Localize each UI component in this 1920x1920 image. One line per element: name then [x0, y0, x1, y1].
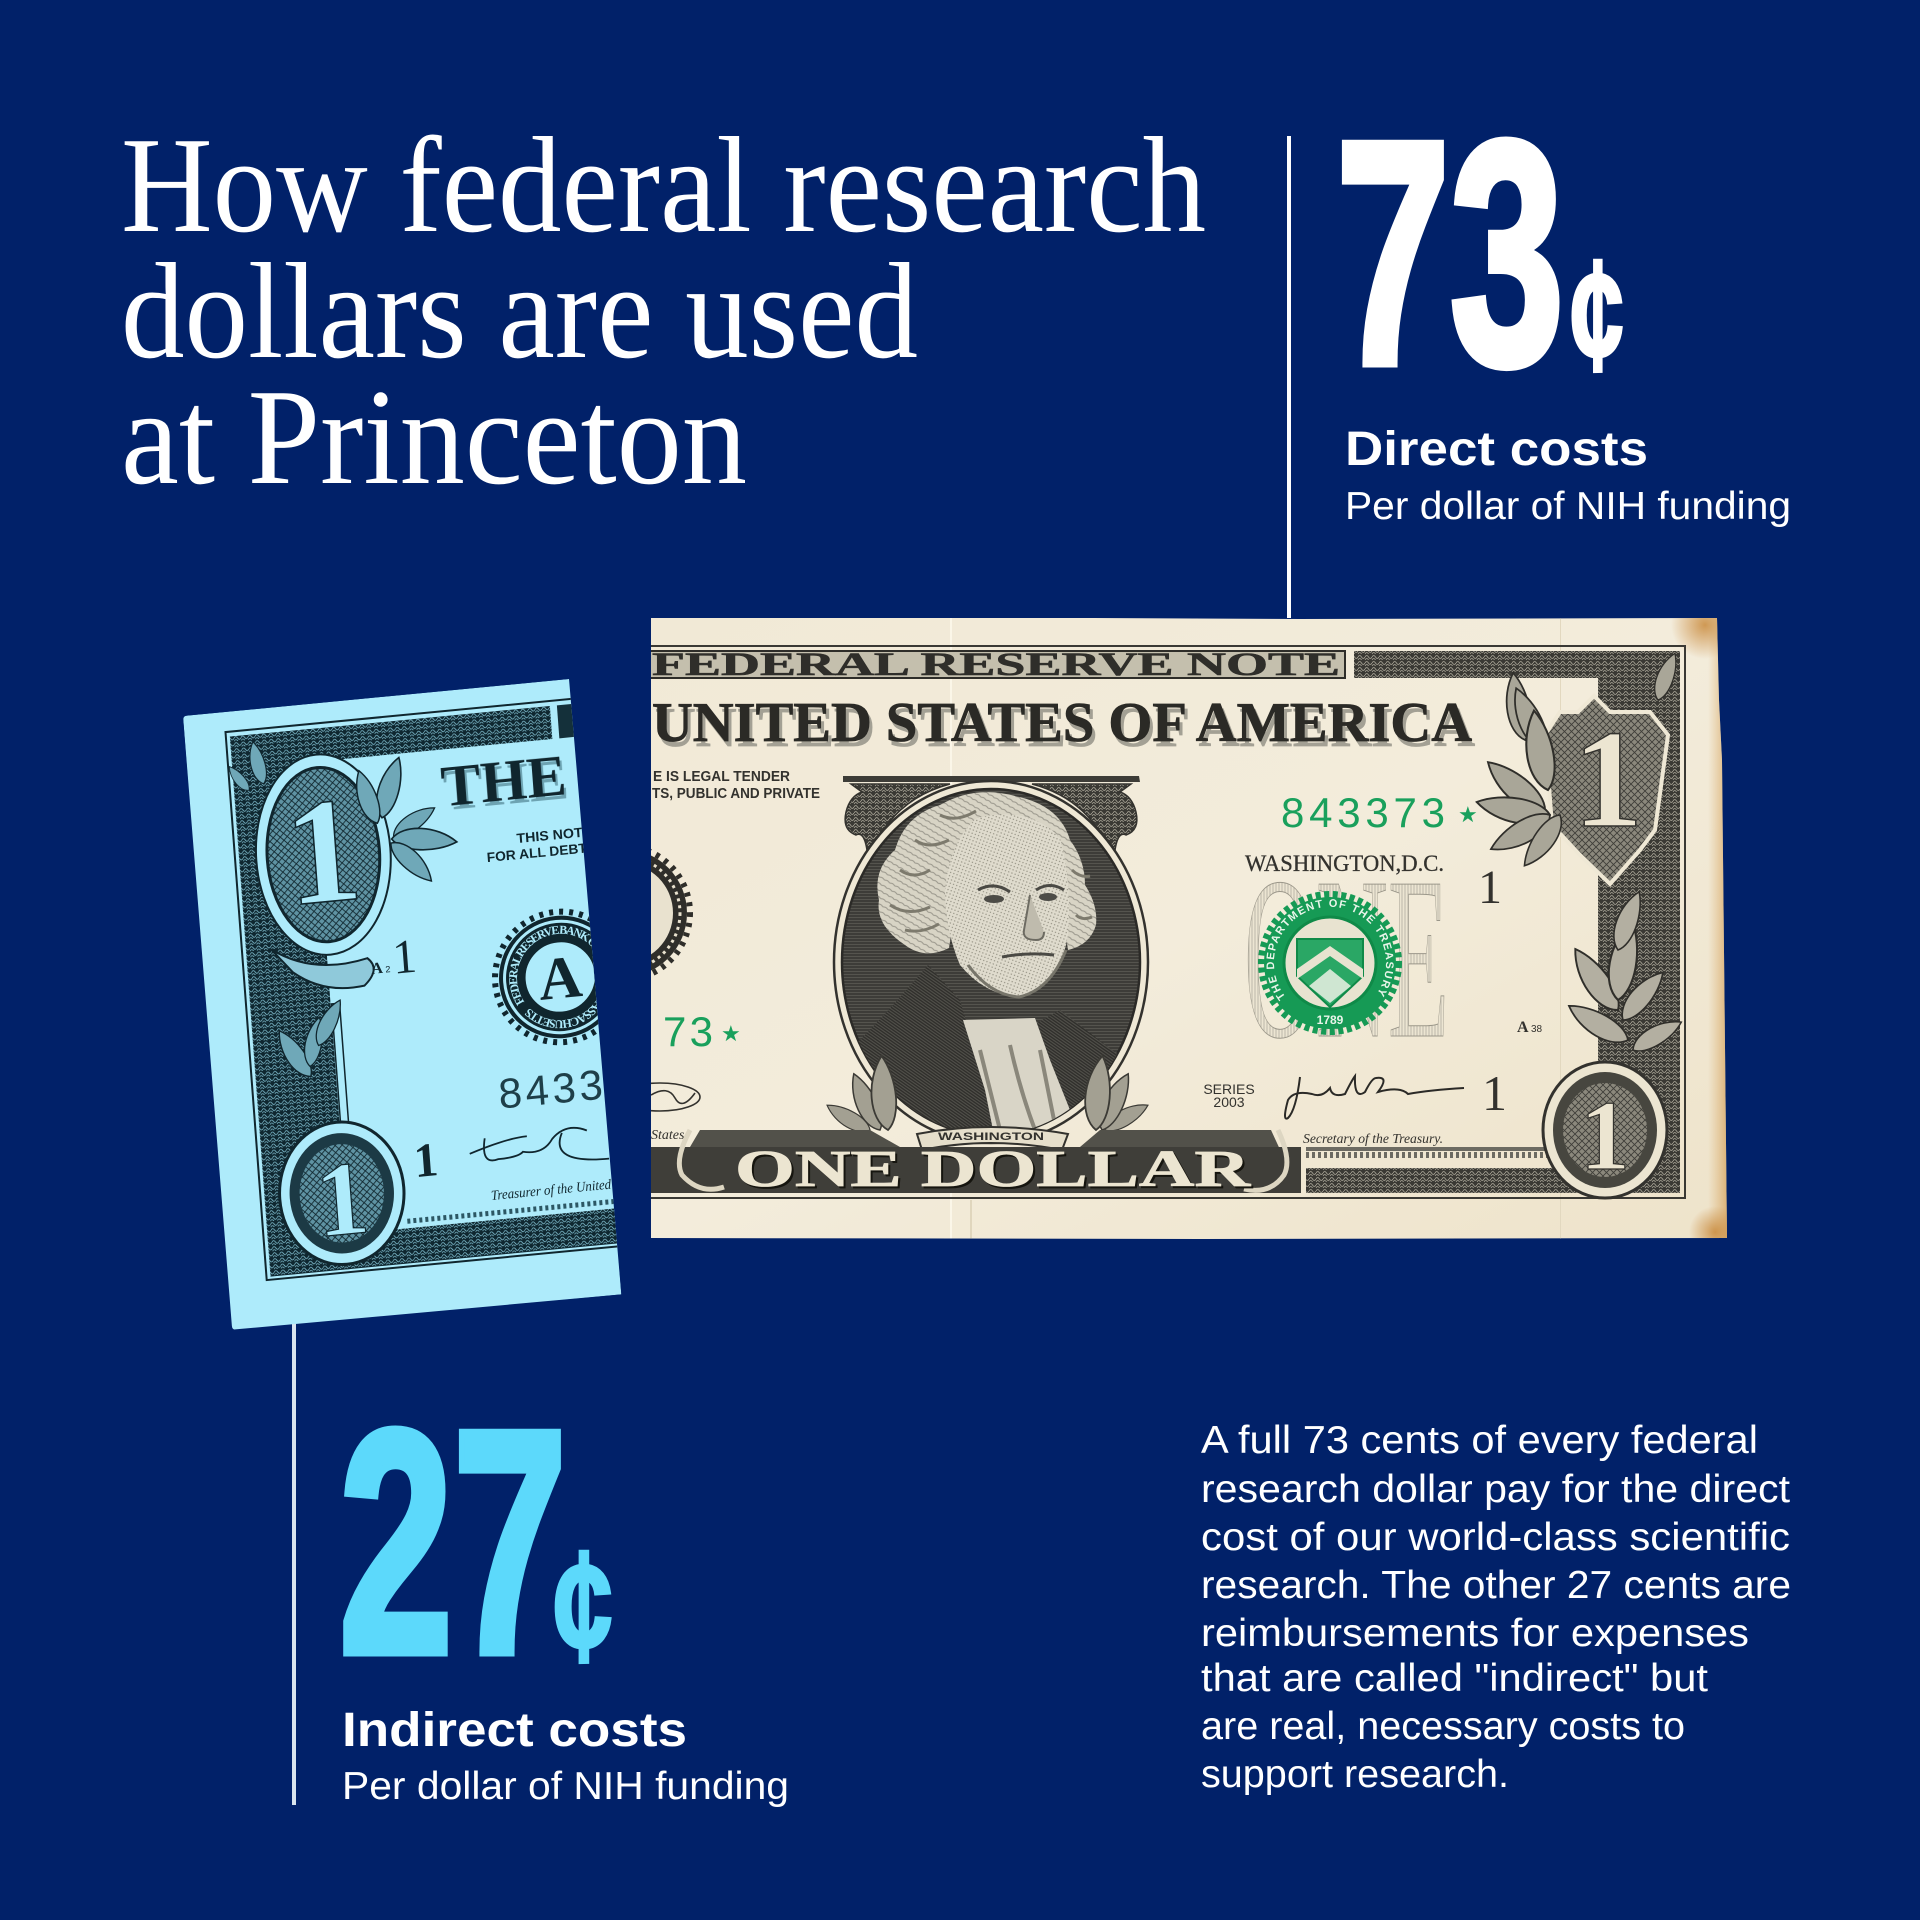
stat: 73 cents direct costs: Per dollar of NIH funding [1345, 485, 1791, 528]
title [121, 109, 1206, 513]
stat: 73 cents direct costs: Direct costs [1345, 423, 1648, 476]
title: dollars are used [121, 235, 918, 387]
federal reserve seal [492, 908, 598, 1046]
bottom right digit 1 medallion [1543, 1062, 1667, 1198]
plate position a38 [1517, 1022, 1542, 1032]
legal text [485, 824, 588, 865]
digit 1 oval: 1 [279, 765, 367, 938]
portrait frame [834, 776, 1148, 1143]
partial federal reserve seal [651, 848, 693, 976]
treasury seal [1258, 891, 1402, 1035]
green serial number: 843373 [1281, 789, 1445, 836]
plate a2: A [371, 960, 384, 978]
washington banner: WASHINGTON [938, 1131, 1044, 1143]
federal reserve seal: A [536, 943, 585, 1014]
laurel leaves [229, 742, 458, 1078]
upper laurel leaves [1474, 650, 1682, 872]
green serial left [665, 1017, 740, 1046]
outer frame [651, 646, 1685, 1198]
signature [1285, 1076, 1464, 1119]
outer frame [226, 698, 626, 1280]
body paragraph: research. The other 27 cents are [1201, 1564, 1791, 1607]
green serial number: ★ [1458, 802, 1478, 827]
stat: 73 cents direct costs [1336, 76, 1791, 528]
green serial number [1282, 798, 1476, 828]
plate position a38: 38 [1531, 1024, 1543, 1035]
scroll ornament [271, 948, 375, 990]
ornament row [407, 1201, 622, 1221]
the heading: THE [439, 742, 569, 819]
series 2003: 2003 [1213, 1094, 1245, 1110]
body paragraph: research dollar pay for the direct [1201, 1468, 1790, 1511]
bottom right digit 1 medallion: 1 [1580, 1080, 1630, 1191]
body paragraph: support research. [1201, 1753, 1509, 1796]
portrait: george washington [823, 792, 1152, 1150]
digit 1 medallion [278, 1120, 406, 1266]
plate number 1: 1 [1478, 861, 1502, 914]
right shield with digit 1: 1 [1573, 702, 1643, 857]
plate position a38: A [1517, 1019, 1529, 1036]
treasury seal: 1789 [1317, 1013, 1344, 1027]
secretary caption: Secretary of the Treasury. [1303, 1132, 1443, 1147]
title: How federal research [121, 109, 1206, 261]
series 2003 [1204, 1084, 1254, 1107]
green serial left: ★ [721, 1021, 741, 1046]
stat: 73 cents direct costs: ¢ [1570, 227, 1624, 403]
band: one dollar: ONE DOLLAR [735, 1141, 1252, 1198]
dollar bill: 73 percent portion [651, 618, 1727, 1239]
legal tender text: TS, PUBLIC AND PRIVATE [652, 786, 820, 802]
series 2003: SERIES [1203, 1081, 1255, 1097]
serial number: 8433 [497, 1061, 604, 1118]
left signature oval [651, 1082, 701, 1112]
right border pattern [1598, 651, 1680, 1193]
band: federal reserve note: FEDERAL RESERVE NOTE [652, 647, 1340, 683]
legal tender text: E IS LEGAL TENDER [653, 769, 790, 785]
lower laurel leaves [1568, 891, 1682, 1052]
plate 1: 1 [412, 1133, 440, 1188]
laurel leaves near portrait [823, 1055, 1152, 1138]
states text: States. [651, 1128, 688, 1143]
heading: united states of america: UNITED STATES OF AMERICA [652, 692, 1473, 754]
body paragraph: cost of our world-class scientific [1201, 1516, 1790, 1559]
dollar bill: 27 percent portion (blue) [183, 679, 622, 1330]
blue paper [178, 672, 635, 1341]
body paragraph: that are called "indirect" but [1201, 1657, 1708, 1700]
dotted ornament row [1306, 1152, 1555, 1158]
plate number 1 lower: 1 [1482, 1065, 1507, 1121]
stat: 27 cents indirect costs: Per dollar of NIH funding [342, 1765, 789, 1808]
washington d.c.: WASHINGTON,D.C. [1245, 851, 1444, 876]
plate a2: 1 [391, 930, 419, 985]
treasurer signature [469, 1125, 609, 1172]
green serial left: 73 [663, 1008, 713, 1055]
band: one dollar [651, 1130, 1301, 1198]
legal text: FOR ALL DEBT [486, 840, 588, 865]
digit 1 medallion: 1 [312, 1138, 373, 1260]
bill paper [651, 591, 1741, 1258]
stat: 27 cents indirect costs [339, 1365, 789, 1808]
body paragraph: reimbursements for expenses [1201, 1612, 1749, 1655]
stat: 73 cents direct costs: 73 [1336, 76, 1564, 431]
plate a2: 2 [385, 964, 391, 975]
legal text: THIS NOT [516, 825, 584, 846]
stat: 27 cents indirect costs: ¢ [553, 1518, 613, 1694]
federal reserve seal: FEDERAL RESERVE BANK OF BOSTON MASSACHUSETTS [509, 926, 598, 1028]
treasury seal: THE DEPARTMENT OF THE TREASURY [1266, 899, 1394, 1002]
washington banner [917, 1127, 1068, 1150]
divider line: indirect costs [292, 1320, 296, 1805]
dollar bill: 73 percent portion: ONE [1244, 830, 1449, 1087]
border pattern [230, 702, 627, 1277]
legal tender text [652, 771, 820, 800]
body paragraph [1201, 1419, 1791, 1796]
treasurer caption: Treasurer of the United [490, 1177, 613, 1204]
body paragraph: are real, necessary costs to [1201, 1705, 1685, 1748]
plate a2 [369, 930, 419, 987]
title: at Princeton [121, 361, 747, 513]
stat: 27 cents indirect costs: Indirect costs [342, 1704, 687, 1757]
right shield with digit 1 [1545, 696, 1668, 884]
stat: 27 cents indirect costs: 27 [339, 1365, 567, 1720]
digit 1 oval [255, 753, 392, 956]
divider line: direct costs [1287, 136, 1291, 618]
band: federal reserve note [651, 650, 1598, 679]
body paragraph: A full 73 cents of every federal [1201, 1419, 1758, 1462]
